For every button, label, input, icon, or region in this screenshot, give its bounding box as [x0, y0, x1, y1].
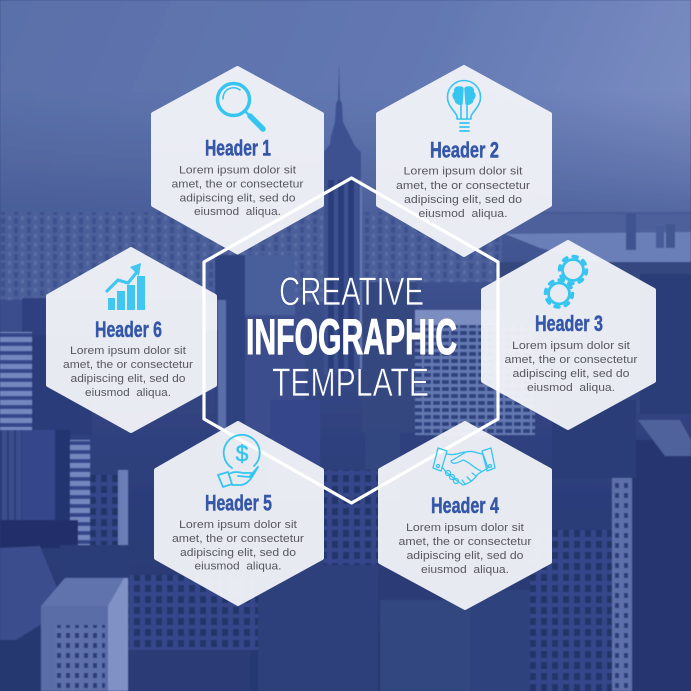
block: header 2 text: eiusmod aliqua.: [418, 208, 508, 220]
block: header 5 text: eiusmod aliqua.: [194, 560, 282, 572]
panel: header 5 hexagon: [156, 423, 322, 604]
block: header 5 text: Header 5: [205, 490, 272, 516]
block: header 6 text: eiusmod aliqua.: [85, 387, 171, 399]
block: header 4 text: Lorem ipsum dolor sit: [406, 522, 525, 534]
block: header 1 text: adipiscing elit, sed do: [180, 192, 296, 204]
panel: header 3 hexagon: [483, 242, 654, 428]
block: header 4 text: eiusmod aliqua.: [421, 564, 509, 576]
block: header 3 text: [504, 311, 638, 394]
block: header 3 text: eiusmod aliqua.: [527, 382, 615, 394]
block: header 5 text: Lorem ipsum dolor sit: [179, 519, 298, 531]
title: INFOGRAPHIC: [246, 309, 457, 365]
block: header 6 text: Lorem ipsum dolor sit: [70, 345, 187, 357]
block: header 6 text: amet, the or consectetur: [63, 359, 193, 371]
central hexagon outline: [204, 178, 498, 503]
block: header 1 text: Header 1: [205, 136, 271, 160]
block: header 5 text: adipiscing elit, sed do: [180, 547, 296, 559]
panel: header 1 hexagon: [153, 68, 322, 252]
block: header 3 text: Lorem ipsum dolor sit: [512, 340, 631, 352]
block: header 1 text: [172, 136, 304, 218]
block: header 5 text: amet, the or consectetur: [172, 533, 304, 545]
block: header 4 text: adipiscing elit, sed do: [406, 550, 524, 562]
block: header 1 text: Lorem ipsum dolor sit: [179, 164, 297, 176]
block: header 4 text: Header 4: [431, 493, 499, 518]
block: header 1 text: amet, the or consectetur: [172, 178, 304, 190]
block: header 6 text: Header 6: [95, 317, 162, 342]
block: header 2 text: adipiscing elit, sed do: [404, 194, 522, 206]
icon: magnifying glass: [218, 84, 263, 129]
block: header 2 text: [396, 138, 530, 220]
block: header 3 text: Header 3: [535, 311, 603, 336]
panel: header 4 hexagon: [380, 423, 550, 608]
block: header 2 text: amet, the or consectetur: [396, 180, 530, 192]
icon: hand holding dollar coin: $: [236, 440, 249, 466]
block: header 2 text: Header 2: [430, 138, 499, 162]
block: header 4 text: amet, the or consectetur: [398, 536, 532, 548]
block: header 4 text: [398, 493, 532, 576]
block: header 2 text: Lorem ipsum dolor sit: [404, 166, 523, 178]
Empire State Building: [324, 60, 362, 375]
icon: hand holding dollar coin: [218, 435, 260, 487]
block: header 6 text: adipiscing elit, sed do: [70, 373, 186, 385]
block: header 3 text: amet, the or consectetur: [504, 354, 638, 366]
icon: light bulb with brain: [448, 80, 480, 131]
panel: header 2 hexagon: [378, 67, 550, 255]
block: header 6 text: [63, 317, 193, 399]
block: header 5 text: [172, 490, 304, 572]
title: [246, 270, 457, 405]
icon: rising bar chart: [107, 263, 145, 310]
block: header 3 text: adipiscing elit, sed do: [512, 368, 630, 380]
title: CREATIVE: [279, 270, 424, 314]
panel: header 6 hexagon: [48, 249, 215, 431]
title: TEMPLATE: [272, 361, 429, 405]
block: header 1 text: eiusmod aliqua.: [194, 206, 281, 218]
icon: handshake: [433, 448, 495, 485]
icon: gears: [546, 256, 586, 307]
